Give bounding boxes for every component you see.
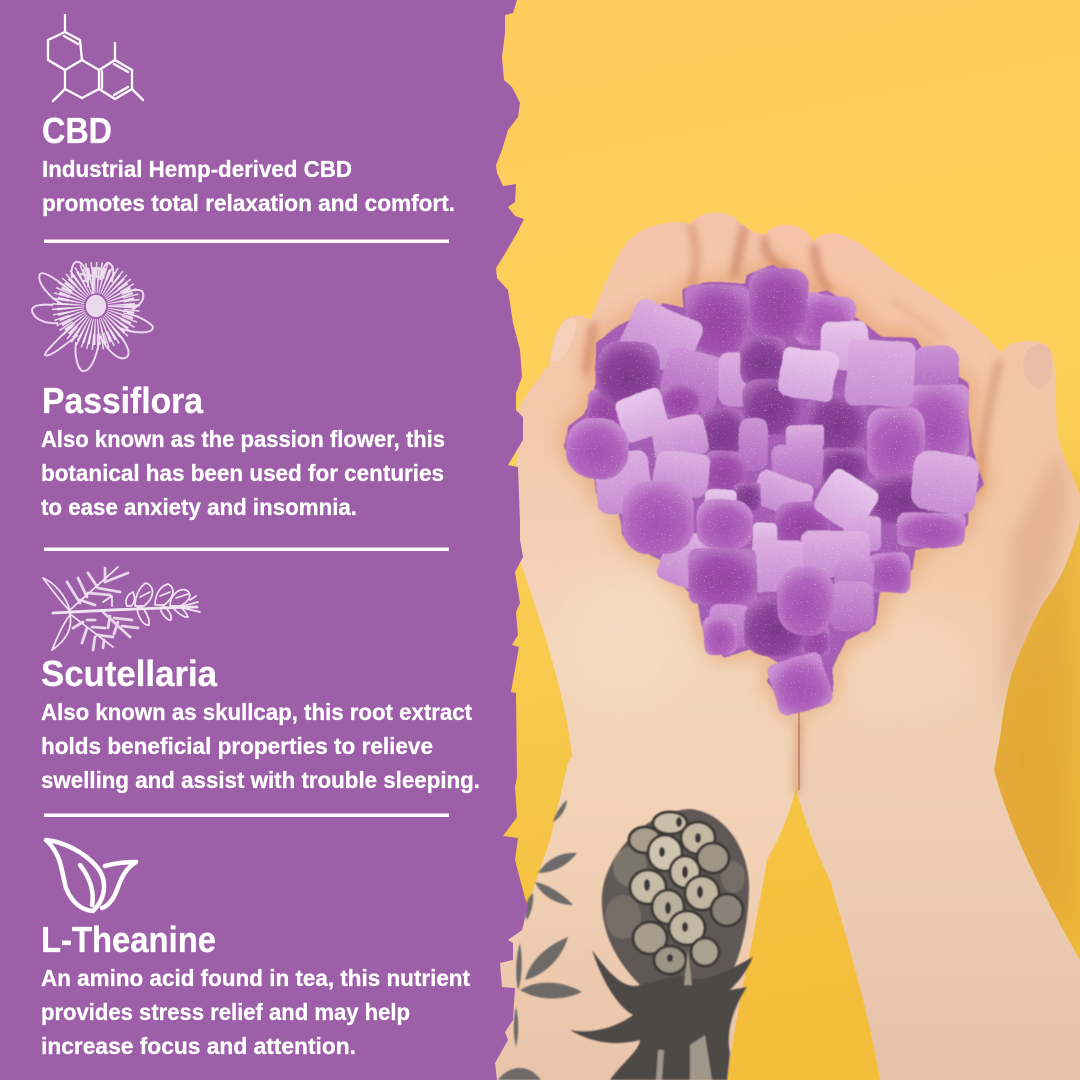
heading and text: L-Theanine: [41, 919, 470, 1059]
heading and text: Passiflora: to ease anxiety and insomnia.: [41, 494, 357, 520]
gummies pile: [560, 260, 990, 730]
icon: CBD molecule: [48, 15, 143, 101]
heading and text: CBD: CBD: [42, 110, 112, 151]
heading and text: Passiflora: Passiflora: [42, 380, 204, 421]
heading and text: CBD: [42, 110, 455, 216]
heading and text: CBD: Industrial Hemp-derived CBD: [42, 156, 352, 182]
photo: cupped hands: [460, 213, 1080, 1080]
icon: skullcap sprig: [43, 567, 200, 650]
background shadow: around right hand: [970, 480, 1080, 960]
tattoo: pineapple and leaves: [498, 800, 753, 1080]
pineapple scales: [605, 812, 745, 974]
panel: purple torn-paper column: [0, 0, 528, 1080]
heading and text: L-Theanine: An amino acid found in tea, this nutrient: [41, 965, 470, 991]
thumbnails: [1023, 344, 1052, 388]
hand shading: [560, 224, 1066, 793]
heading and text: CBD: promotes total relaxation and comfort.: [42, 190, 455, 216]
icon: tea leaves: [46, 840, 136, 911]
scale seeds: [644, 817, 703, 962]
heading and text: L-Theanine: L-Theanine: [41, 919, 216, 960]
sugar crystals: [560, 260, 990, 730]
heading and text: Scutellaria: swelling and assist with trouble sleeping.: [41, 767, 480, 793]
heading and text: Passiflora: [41, 380, 445, 520]
right hand and forearm: [760, 225, 1080, 1080]
heading and text: Passiflora: botanical has been used for centuries: [41, 460, 444, 486]
heading and text: Scutellaria: holds beneficial properties to relieve: [41, 733, 433, 759]
heading and text: Passiflora: Also known as the passion flower, this: [41, 426, 445, 452]
heading and text: L-Theanine: increase focus and attention.: [41, 1033, 356, 1059]
heading and text: Scutellaria: [41, 653, 480, 793]
heading and text: L-Theanine: provides stress relief and may help: [41, 999, 410, 1025]
icon: passion flower: [32, 262, 153, 371]
pineapple body: [602, 809, 749, 985]
heading and text: Scutellaria: Scutellaria: [41, 653, 218, 694]
left hand and forearm: [460, 213, 799, 1080]
arm leaves: [498, 800, 582, 1080]
pineapple crown: [570, 950, 753, 1080]
heading and text: Scutellaria: Also known as skullcap, this root extract: [41, 699, 472, 725]
individual gummies: [567, 267, 981, 718]
